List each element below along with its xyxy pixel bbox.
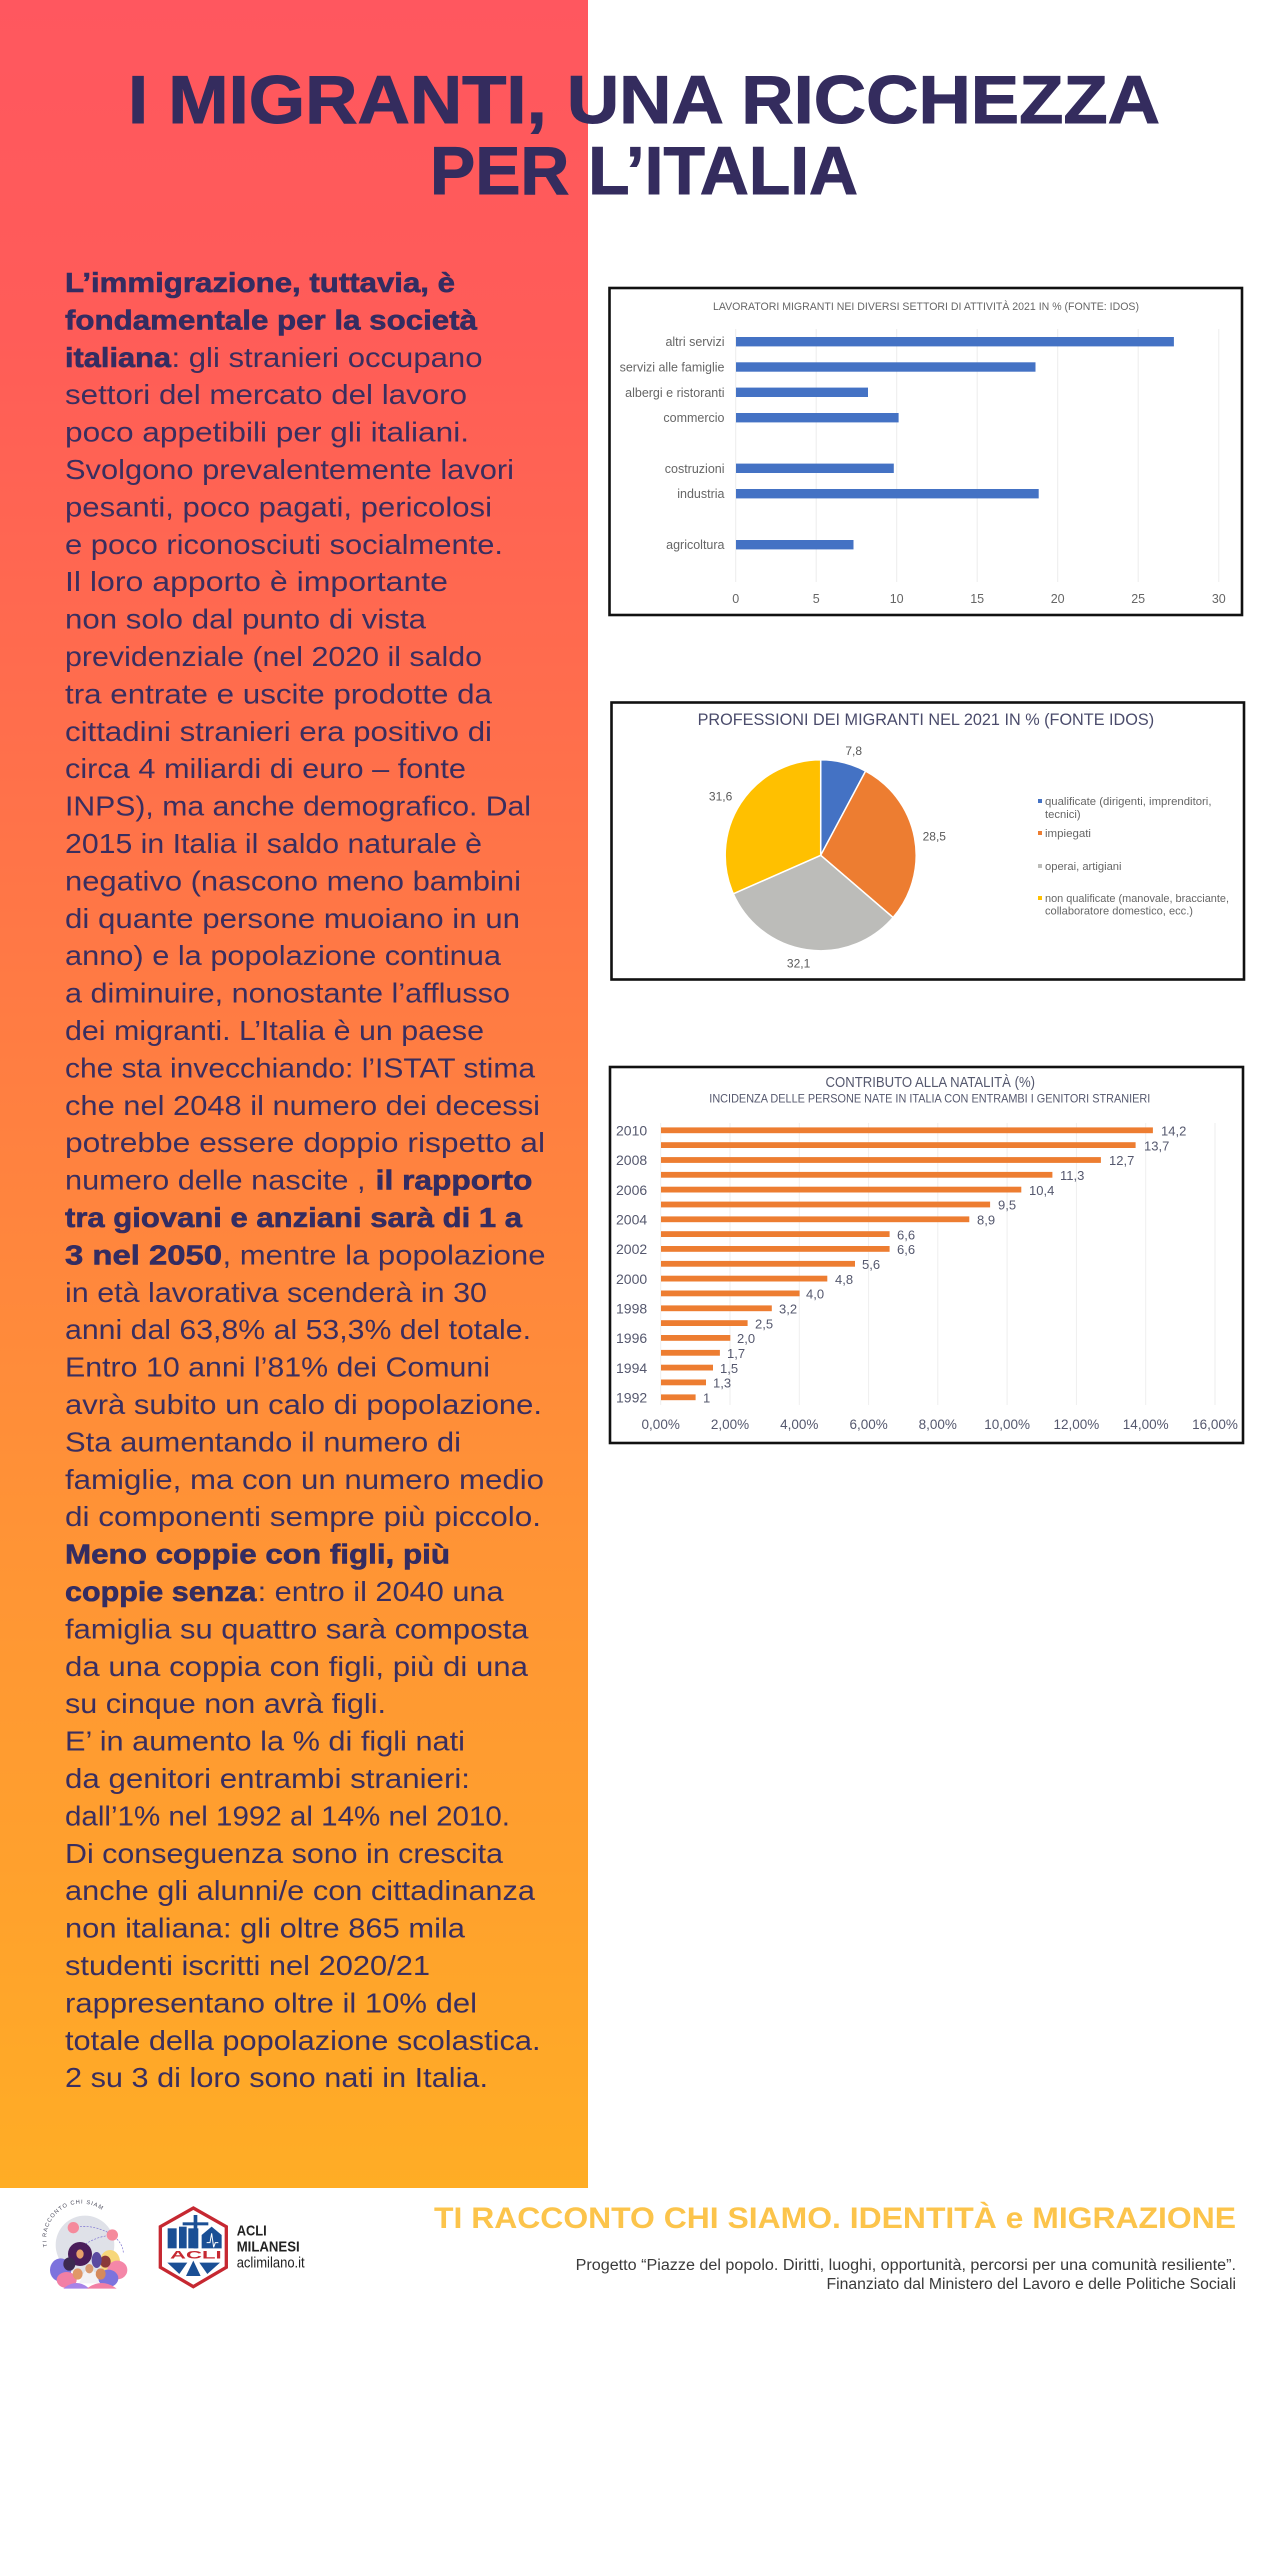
value labels: 8,9 <box>977 1212 995 1228</box>
year labels: 1992 <box>616 1390 647 1406</box>
value labels: 6,6 <box>897 1227 915 1242</box>
year labels: 2002 <box>616 1241 647 1257</box>
text block: main article: Svolgono prevalentemente lavori <box>65 454 514 485</box>
value labels: 1 <box>703 1390 710 1406</box>
category labels: costruzioni <box>665 462 724 476</box>
axis labels: 15 <box>970 592 984 606</box>
pie <box>725 760 916 951</box>
category labels: servizi alle famiglie <box>620 360 725 374</box>
icon: Ti racconto chi siamo logo: TI RACCONTO CHI SIAMO <box>42 2200 104 2248</box>
text block: main article: fondamentale per la società <box>65 304 477 335</box>
axis labels <box>642 1417 1238 1432</box>
text block: main article: E’ in aumento la % di figli nati <box>65 1726 465 1757</box>
legend: operai, artigiani <box>1045 861 1122 873</box>
chart title: INCIDENZA DELLE PERSONE NATE IN ITALIA CON ENTRAMBI I GENITORI STRANIERI <box>709 1092 1150 1106</box>
legend: qualificate (dirigenti, imprenditori, <box>1045 796 1212 808</box>
category labels <box>620 335 725 552</box>
legend: collaboratore domestico, ecc.) <box>1045 906 1193 918</box>
text block: main article: non italiana: gli oltre 865 mila <box>65 1913 465 1944</box>
text block: main article: 3 nel 2050 <box>65 1239 222 1270</box>
text block: main article: 2015 in Italia il saldo naturale è <box>65 828 482 859</box>
axis labels: 8,00% <box>919 1417 957 1432</box>
text block: main article: italiana <box>65 342 171 373</box>
text block: main article: anni dal 63,8% al 53,3% del totale. <box>65 1314 531 1345</box>
text block: main article: famiglia su quattro sarà composta <box>65 1613 529 1644</box>
title: PER L’ITALIA <box>430 133 858 209</box>
text block: main article: Meno coppie con figli, più <box>65 1539 450 1570</box>
axis labels: 5 <box>813 592 820 606</box>
legend: tecnici) <box>1045 809 1081 821</box>
panel: pie chart professions <box>612 702 1244 980</box>
text block: main article: negativo (nascono meno bambini <box>65 865 521 896</box>
text block: main article: , mentre la popolazione <box>222 1239 546 1270</box>
icon: ACLI hexagon logo <box>160 2208 226 2287</box>
text block: main article: di componenti sempre più piccolo. <box>65 1501 541 1532</box>
footer project credits: Progetto “Piazze del popolo. Diritti, luoghi, opportunità, percorsi per una comunità resiliente”. <box>576 2257 1236 2274</box>
axis labels: 10 <box>890 592 904 606</box>
text block: main article: a diminuire, nonostante l’afflusso <box>65 978 510 1009</box>
value labels: 10,4 <box>1029 1183 1054 1198</box>
chart title <box>709 1074 1150 1106</box>
text block: main article: anno) e la popolazione continua <box>65 940 501 971</box>
data labels <box>709 744 946 970</box>
text block: main article: da genitori entrambi stranieri: <box>65 1763 470 1794</box>
text block: main article: che sta invecchiando: l’ISTAT stima <box>65 1052 535 1083</box>
data labels: 28,5 <box>923 830 946 844</box>
value labels: 14,2 <box>1161 1124 1186 1138</box>
axis labels: 0,00% <box>642 1417 680 1432</box>
footer project credits <box>576 2257 1236 2293</box>
text block: main article: in età lavorativa scenderà in 30 <box>65 1277 487 1308</box>
value labels: 4,8 <box>835 1272 853 1287</box>
text block: main article: settori del mercato del lavoro <box>65 379 467 410</box>
value labels: 12,7 <box>1109 1153 1134 1168</box>
legend <box>1038 796 1229 918</box>
text block: main article: di quante persone muoiano in un <box>65 903 520 934</box>
legend: non qualificate (manovale, bracciante, <box>1045 893 1229 905</box>
axis labels: 14,00% <box>1123 1417 1169 1432</box>
text block: main article: tra entrate e uscite prodotte da <box>65 678 492 709</box>
panel: bar chart sectors <box>610 288 1242 615</box>
axis labels: 2,00% <box>711 1417 749 1432</box>
legend: impiegati <box>1045 828 1091 840</box>
text block: main article: pesanti, poco pagati, pericolosi <box>65 491 492 522</box>
panel: gradient background <box>0 0 588 2188</box>
title: I MIGRANTI, UNA RICCHEZZA <box>128 62 1160 138</box>
axis labels: 10,00% <box>984 1417 1030 1432</box>
text block: main article: cittadini stranieri era positivo di <box>65 716 492 747</box>
text block: main article: INPS), ma anche demografico. Dal <box>65 791 531 822</box>
year labels <box>616 1122 647 1406</box>
data labels: 31,6 <box>709 790 733 804</box>
text block: main article: che nel 2048 il numero dei decessi <box>65 1090 540 1121</box>
value labels: 3,2 <box>779 1302 797 1316</box>
text block: main article: anche gli alunni/e con cittadinanza <box>65 1875 535 1906</box>
year labels: 1996 <box>616 1330 647 1346</box>
text block: main article: non solo dal punto di vista <box>65 604 426 635</box>
value labels: 6,6 <box>897 1242 915 1257</box>
year labels: 2008 <box>616 1152 647 1168</box>
text block: main article: avrà subito un calo di popolazione. <box>65 1389 542 1420</box>
axis labels: 20 <box>1051 592 1065 606</box>
text block: main article: previdenziale (nel 2020 il saldo <box>65 641 482 672</box>
text: ACLI Milanesi wordmark: ACLI <box>237 2223 267 2240</box>
axis labels: 6,00% <box>849 1417 888 1432</box>
axis labels: 0 <box>732 592 739 606</box>
chart title: LAVORATORI MIGRANTI NEI DIVERSI SETTORI DI ATTIVITÀ 2021 IN % (FONTE: IDOS) <box>713 300 1139 313</box>
text block: main article: 2 su 3 di loro sono nati in Italia. <box>65 2062 488 2093</box>
data labels: 7,8 <box>845 744 862 758</box>
value labels: 9,5 <box>998 1198 1016 1213</box>
year labels: 1998 <box>616 1300 647 1316</box>
icon: ACLI hexagon logo: ACLI <box>170 2250 222 2262</box>
text block: main article: studenti iscritti nel 2020/21 <box>65 1950 430 1981</box>
value labels <box>703 1124 1186 1406</box>
axis labels: 25 <box>1131 592 1145 606</box>
text: ACLI Milanesi wordmark <box>237 2223 305 2271</box>
category labels: industria <box>677 487 725 501</box>
category labels: albergi e ristoranti <box>625 386 724 400</box>
text block: main article: : entro il 2040 una <box>258 1576 504 1607</box>
chart title: CONTRIBUTO ALLA NATALITÀ (%) <box>826 1074 1035 1091</box>
text block: main article: e poco riconosciuti socialmente. <box>65 529 503 560</box>
year labels: 2010 <box>616 1122 647 1138</box>
value labels: 2,0 <box>737 1331 755 1346</box>
axis labels <box>732 592 1226 606</box>
text block: main article: L’immigrazione, tuttavia, è <box>65 267 455 298</box>
value labels: 11,3 <box>1060 1168 1084 1183</box>
text block: main article: Di conseguenza sono in crescita <box>65 1838 503 1869</box>
footer heading: TI RACCONTO CHI SIAMO. IDENTITÀ e MIGRAZIONE <box>434 2201 1236 2235</box>
axis labels: 12,00% <box>1054 1417 1099 1432</box>
data labels: 32,1 <box>787 956 811 970</box>
year labels: 2006 <box>616 1182 647 1198</box>
axis labels: 30 <box>1212 592 1226 606</box>
value labels: 1,7 <box>727 1346 745 1361</box>
bars <box>661 1127 1153 1400</box>
text block: main article: numero delle nascite , <box>65 1165 366 1196</box>
text block: main article: circa 4 miliardi di euro – fonte <box>65 753 466 784</box>
category labels: altri servizi <box>665 335 724 349</box>
axis labels: 4,00% <box>780 1417 818 1432</box>
axis labels: 16,00% <box>1192 1417 1238 1432</box>
text block: main article: tra giovani e anziani sarà di 1 a <box>65 1202 522 1233</box>
text block: main article: rappresentano oltre il 10% del <box>65 1987 477 2018</box>
text block: main article: coppie senza <box>65 1576 257 1607</box>
panel: bar chart births <box>610 1067 1243 1443</box>
year labels: 2000 <box>616 1271 647 1287</box>
text block: main article: da una coppia con figli, più di una <box>65 1651 528 1682</box>
text block: main article: famiglie, ma con un numero medio <box>65 1464 544 1495</box>
text block: main article: Il loro apporto è importante <box>65 566 448 597</box>
text block: main article: : gli stranieri occupano <box>172 342 482 373</box>
text block: main article: su cinque non avrà figli. <box>65 1688 386 1719</box>
text block: main article: potrebbe essere doppio rispetto al <box>65 1127 545 1158</box>
text block: main article: dei migranti. L’Italia è un paese <box>65 1015 484 1046</box>
value labels: 2,5 <box>755 1316 773 1331</box>
chart title: PROFESSIONI DEI MIGRANTI NEL 2021 IN % (FONTE IDOS) <box>698 711 1154 729</box>
bars <box>736 337 1174 549</box>
footer project credits: Finanziato dal Ministero del Lavoro e delle Politiche Sociali <box>826 2276 1236 2293</box>
year labels: 1994 <box>616 1360 647 1376</box>
title <box>128 62 1160 209</box>
text block: main article: totale della popolazione scolastica. <box>65 2025 540 2056</box>
category labels: agricoltura <box>666 538 725 552</box>
icon: Ti racconto chi siamo logo <box>42 2200 128 2289</box>
year labels: 2004 <box>616 1212 647 1228</box>
value labels: 1,5 <box>720 1361 738 1376</box>
text: ACLI Milanesi wordmark: aclimilano.it <box>237 2254 305 2271</box>
text block: main article: dall’1% nel 1992 al 14% nel 2010. <box>65 1800 510 1831</box>
value labels: 13,7 <box>1144 1138 1169 1153</box>
text block: main article <box>65 267 546 2093</box>
value labels: 1,3 <box>713 1376 731 1391</box>
text block: main article: il rapporto <box>376 1165 532 1196</box>
text block: main article: Entro 10 anni l’81% dei Comuni <box>65 1352 490 1383</box>
text: ACLI Milanesi wordmark: MILANESI <box>237 2239 300 2256</box>
text block: main article: Sta aumentando il numero di <box>65 1426 461 1457</box>
category labels: commercio <box>663 411 725 425</box>
value labels: 4,0 <box>806 1287 824 1302</box>
text block: main article: poco appetibili per gli italiani. <box>65 417 469 448</box>
value labels: 5,6 <box>862 1257 880 1272</box>
